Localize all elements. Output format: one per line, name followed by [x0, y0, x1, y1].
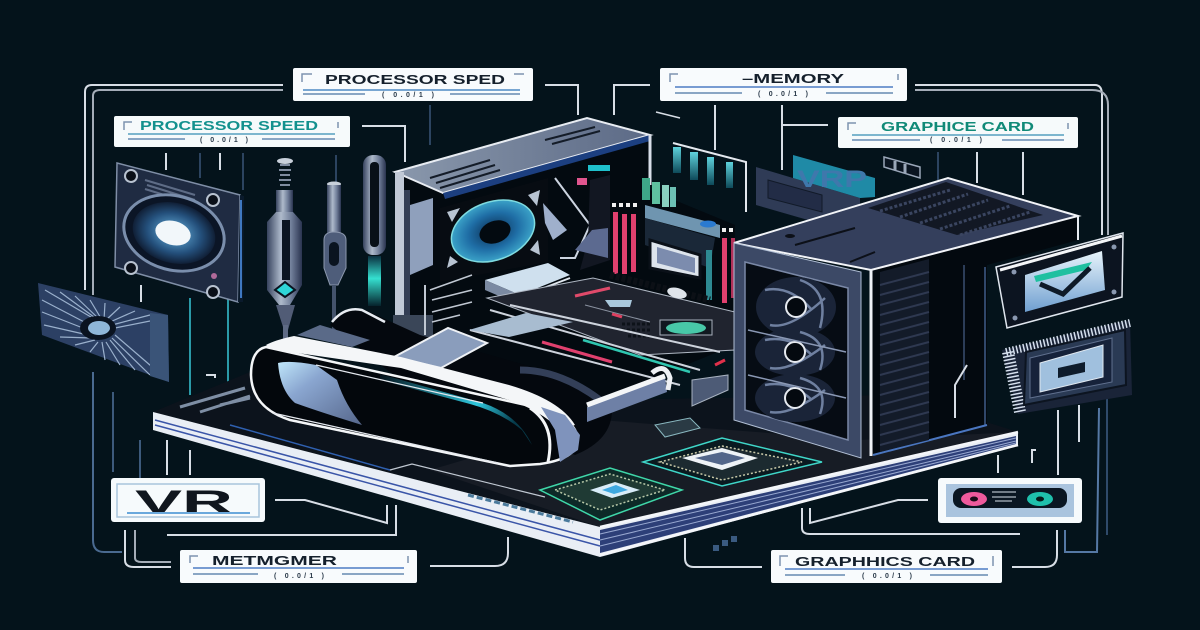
- blue fan: [440, 178, 548, 282]
- label: memory top: [660, 68, 907, 101]
- case frame: [395, 172, 404, 322]
- slab edge: [153, 412, 1018, 557]
- icon: audio ports box: [938, 478, 1082, 523]
- label: VR box: VR: [135, 484, 233, 520]
- fan 3: [755, 374, 835, 422]
- label: graphics card bottom: ( 0.0/1 ): [862, 573, 912, 580]
- label: memory bottom: [180, 550, 417, 583]
- label: processor speed top: ( 0.0/1 ): [382, 92, 434, 99]
- VR sign panel: VRP: [797, 166, 867, 193]
- ram sticks: [613, 212, 618, 274]
- label: graphics card teal: GRAPHICE CARD: [881, 119, 1034, 134]
- lower stripes: [470, 305, 720, 385]
- cpu socket: [645, 205, 720, 238]
- label: VR box: [111, 478, 265, 522]
- visor lens highlight: [278, 362, 362, 425]
- tower left face: [734, 243, 861, 458]
- chip: small: [540, 468, 682, 520]
- icon: glowing tube: [363, 155, 386, 306]
- case top: [395, 118, 650, 193]
- bracket and cooler: [543, 203, 567, 240]
- label: processor speed top: PROCESSOR SPED: [325, 72, 505, 87]
- tower top face: [734, 178, 1078, 270]
- VR headset: [251, 309, 728, 466]
- icon: check panel: [996, 233, 1123, 328]
- tower right face: [871, 216, 1078, 455]
- outer shell: [251, 347, 578, 466]
- icon: connector cable left: [267, 158, 302, 340]
- label: memory top: –MEMORY: [742, 71, 845, 86]
- chip: large: [643, 438, 822, 486]
- label: graphics card bottom: GRAPHHICS CARD: [795, 554, 975, 569]
- label: memory bottom: ( 0.0/1 ): [274, 573, 324, 580]
- fan 1: [756, 277, 836, 337]
- shell white band: [266, 336, 575, 430]
- label: memory top: ( 0.0/1 ): [758, 91, 808, 98]
- label: processor speed teal: ( 0.0/1 ): [200, 137, 248, 144]
- fan 2: [755, 328, 835, 376]
- label: processor speed teal: [114, 116, 350, 147]
- right strap arm: [587, 378, 667, 422]
- back strap: [330, 309, 612, 455]
- VR sign panel: [756, 155, 920, 235]
- label: graphics card teal: ( 0.0/1 ): [930, 137, 982, 144]
- label: graphics card teal: [838, 117, 1078, 148]
- connector lines: [85, 85, 1108, 567]
- label: memory bottom: METMGMER: [212, 554, 337, 568]
- label: graphics card bottom: [771, 550, 1002, 583]
- motherboard surface: [487, 278, 735, 355]
- icon: connector cable middle: [324, 182, 346, 340]
- PC tower: [734, 178, 1078, 458]
- icon: heat sink: [38, 283, 169, 382]
- label: processor speed top: [293, 68, 533, 101]
- shell grey strip: [297, 325, 370, 347]
- label: processor speed teal: PROCESSOR SPEED: [140, 118, 318, 133]
- icon: speaker panel: [115, 163, 244, 302]
- platform: [153, 372, 1018, 557]
- drive stack: [485, 263, 570, 295]
- memory stick outline: [673, 143, 746, 212]
- icon: processor chip: [1002, 320, 1132, 414]
- visor cyan reflection: [380, 374, 532, 445]
- open PC case: [393, 118, 735, 400]
- small pixel dots: [713, 536, 737, 551]
